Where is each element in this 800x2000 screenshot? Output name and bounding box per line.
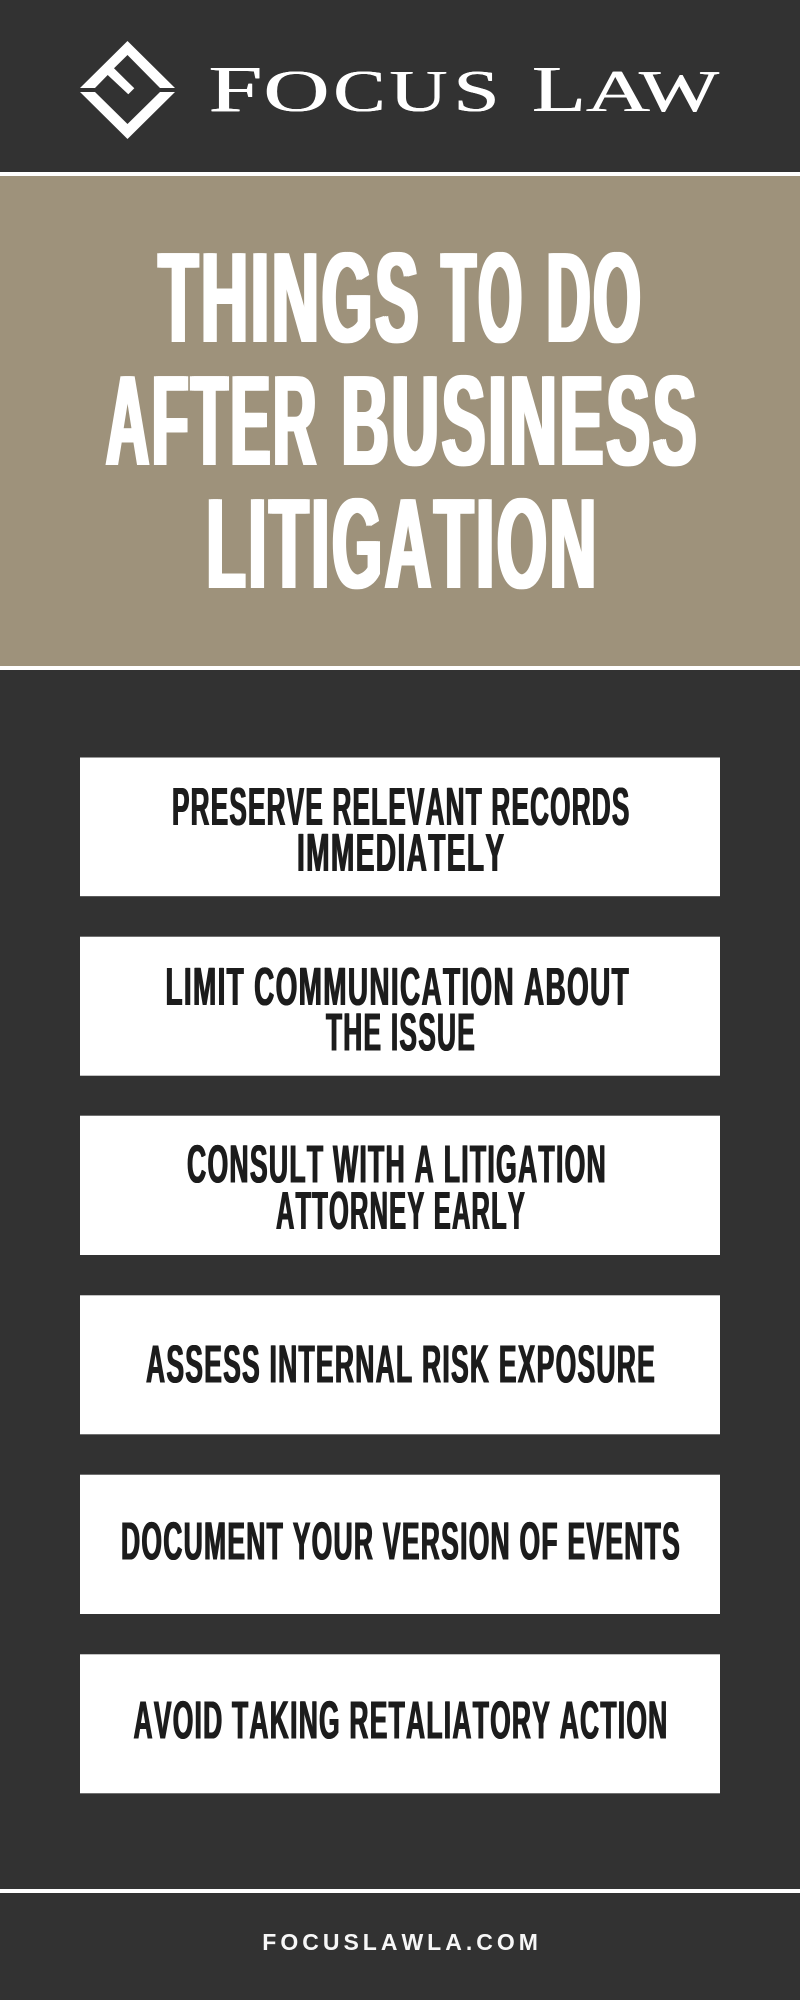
card 5: document events: [80, 1475, 720, 1614]
logo wordmark: Focus Law: O: [264, 58, 330, 124]
card 6: avoid retaliation: [80, 1654, 720, 1793]
card 2: limit communication: [80, 937, 720, 1076]
divider: title rule: [0, 666, 800, 670]
panel: title band: [0, 176, 800, 666]
icon: diamond F logo: [80, 41, 175, 139]
card 3: consult attorney: [80, 1116, 720, 1255]
title: TO: [442, 226, 524, 370]
header: logo: [80, 41, 719, 139]
logo wordmark: Focus Law: [208, 54, 719, 126]
title: AFTER: [106, 349, 319, 493]
card 3: consult attorney: ATTORNEY EARLY: [276, 1182, 526, 1241]
title: [106, 226, 700, 616]
card 2: limit communication: THE ISSUE: [326, 1004, 476, 1063]
title: THINGS: [158, 226, 422, 370]
card 1: preserve records: [80, 758, 720, 896]
logo wordmark: Focus Law: S: [454, 58, 500, 124]
divider: footer rule: [0, 1889, 800, 1893]
logo wordmark: Focus Law: F: [208, 54, 262, 126]
logo wordmark: Focus Law: L: [532, 54, 586, 126]
title: DO: [546, 226, 644, 370]
card 4: assess risk: [80, 1295, 720, 1434]
logo wordmark: Focus Law: U: [390, 58, 448, 124]
footer url: FOCUSLAWLA.COM: [262, 1929, 542, 1955]
card 1: preserve records: IMMEDIATELY: [297, 824, 506, 883]
logo wordmark: Focus Law: W: [639, 58, 719, 124]
logo wordmark: Focus Law: C: [334, 58, 386, 124]
divider: header rule: [0, 172, 800, 176]
logo wordmark: Focus Law: A: [586, 58, 651, 124]
